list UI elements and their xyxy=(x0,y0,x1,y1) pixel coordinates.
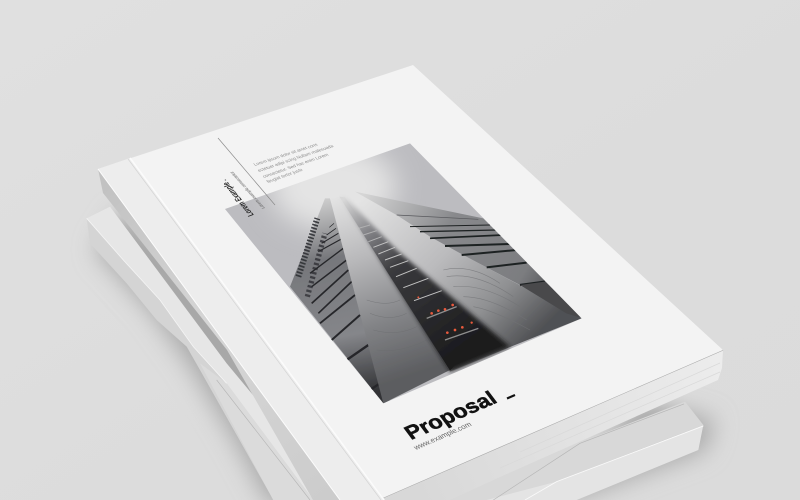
right column curved lines xyxy=(443,268,530,330)
left part of lower brochure xyxy=(87,207,340,500)
lower brochure spine side xyxy=(87,218,313,500)
red window lights xyxy=(417,296,473,334)
dark window strip xyxy=(340,197,510,372)
website url: www.example.com xyxy=(411,420,473,452)
cast shadow xyxy=(95,210,715,500)
spine crease xyxy=(130,158,384,500)
strip window ledges xyxy=(358,225,478,340)
right facade bands xyxy=(397,215,545,285)
page block right edge xyxy=(375,350,723,500)
right facade xyxy=(355,192,583,318)
top brochure xyxy=(98,65,723,500)
lower brochure cover face xyxy=(400,402,703,500)
intro paragraph: feugiat tortor justo xyxy=(266,167,304,184)
lower brochure top face xyxy=(87,207,340,500)
lower right facade shadow xyxy=(520,282,583,318)
center column xyxy=(330,197,450,403)
lower brochure xyxy=(87,207,703,500)
left facade window pattern xyxy=(298,218,325,297)
vertical rule xyxy=(218,138,275,205)
intro paragraph: Lorem ipsum dolor sit amet cons xyxy=(253,142,319,167)
sky xyxy=(220,140,587,407)
intro paragraph: ectetuer adipi scing Nullam malesuada xyxy=(257,144,335,173)
third layer edge xyxy=(200,363,313,500)
left facade bands xyxy=(310,223,380,390)
right part of lower brochure xyxy=(400,402,703,500)
title dash xyxy=(507,395,515,398)
right column xyxy=(369,208,582,372)
lower brochure page block xyxy=(487,425,703,500)
spine side face xyxy=(98,169,345,500)
intro paragraph xyxy=(253,142,335,184)
intro paragraph: consectetur. Sed hac enim Lorem xyxy=(262,152,330,179)
front cover xyxy=(98,65,723,500)
brochure stack scene xyxy=(86,65,724,500)
center column curved lines xyxy=(366,300,416,333)
cover photo: skyscraper xyxy=(220,140,587,407)
left facade xyxy=(290,198,390,403)
rotated heading: Lorem Example . xyxy=(218,178,256,218)
rotated small caption: Lorem.example.consectetur xyxy=(229,170,267,209)
spine strip xyxy=(98,158,385,500)
title: Proposal xyxy=(400,388,501,444)
